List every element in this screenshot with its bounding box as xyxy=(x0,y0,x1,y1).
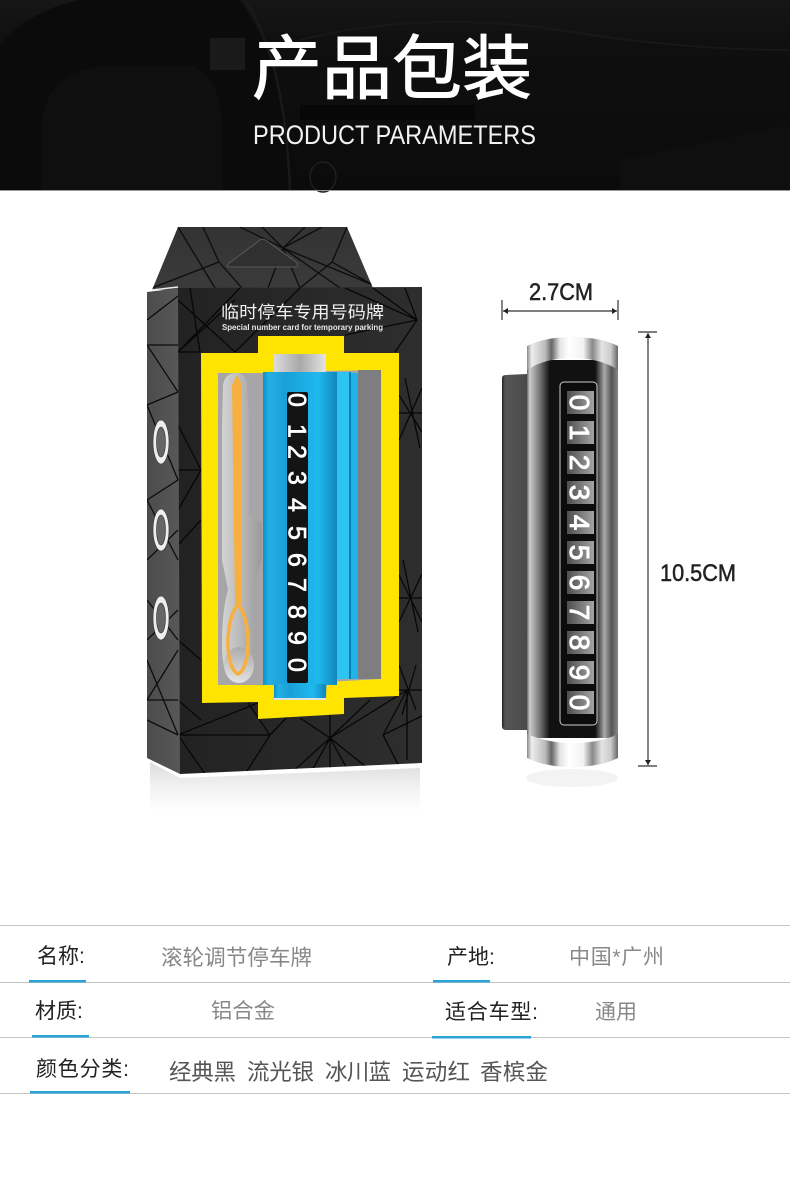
header banner xyxy=(0,0,790,192)
parameter table xyxy=(0,925,790,1094)
box hanger flap xyxy=(152,227,373,290)
row 3 colours: 颜色分类: xyxy=(36,1058,129,1081)
row 2 material: 材质: xyxy=(35,1000,83,1023)
number strip: blue version: 9 xyxy=(282,631,310,645)
number strip: silver version: 0 xyxy=(564,695,595,710)
cap reflection xyxy=(526,769,618,787)
number strip: blue version: 2 xyxy=(282,445,310,459)
row 3 colours: 流光银 xyxy=(247,1060,314,1085)
bottom metal cap xyxy=(527,734,618,767)
number strip: silver version: 7 xyxy=(564,605,595,620)
number strip: blue version: 0 xyxy=(282,393,310,407)
number strip: blue version: 7 xyxy=(282,578,310,592)
title: 产品包装 xyxy=(252,30,532,108)
number strip: blue version: 4 xyxy=(282,498,310,512)
box side logos xyxy=(153,420,169,640)
subtitle: PRODUCT PARAMETERS xyxy=(253,120,536,150)
number strip: silver version: 8 xyxy=(564,635,595,650)
row 2 vehicle type: 适合车型: xyxy=(445,1001,538,1024)
row 1 origin xyxy=(447,946,664,969)
row 1 name: 滚轮调节停车牌 xyxy=(161,945,312,970)
height dimension xyxy=(638,332,736,766)
row 1 name xyxy=(37,945,312,970)
back clip xyxy=(502,374,527,730)
number strip: blue version: 0 xyxy=(282,658,310,672)
number strip: silver version: 3 xyxy=(564,485,595,500)
row 2 material: 铝合金 xyxy=(211,999,275,1023)
number strip: blue version xyxy=(282,392,310,683)
row 3 colours: 经典黑 xyxy=(169,1060,236,1085)
width dimension xyxy=(502,279,618,320)
number strip: silver version xyxy=(560,382,597,725)
row 3 colours: 冰川蓝 xyxy=(325,1060,391,1085)
number strip: silver version: 4 xyxy=(564,515,595,530)
number strip: silver version: 6 xyxy=(564,575,595,590)
product: silver parking card xyxy=(502,337,618,787)
width label: 2.7CM xyxy=(529,279,593,306)
box side face xyxy=(147,288,180,774)
blue cylinder xyxy=(263,354,358,700)
row 2 vehicle type xyxy=(445,1001,637,1024)
box front face xyxy=(178,287,422,774)
row 2 vehicle type: 通用 xyxy=(595,1001,637,1024)
row 1 origin: 中国*广州 xyxy=(569,946,664,969)
cylinder body xyxy=(527,360,618,738)
number strip: silver version: 9 xyxy=(564,665,595,680)
row 1 origin: 产地: xyxy=(447,946,495,969)
key slot xyxy=(222,373,262,683)
number strip: blue version: 3 xyxy=(282,471,310,485)
tray window xyxy=(218,370,381,700)
row 3 colours: 香槟金 xyxy=(480,1060,548,1085)
number strip: silver version: 0 xyxy=(564,395,595,410)
number strip: silver version: 2 xyxy=(564,455,595,470)
row 3 colours xyxy=(36,1058,548,1085)
row 3 colours: 运动红 xyxy=(402,1060,470,1085)
packaging box xyxy=(147,227,422,812)
box subtitle: Special number card for temporary parking xyxy=(222,323,383,332)
top metal cap xyxy=(527,337,618,370)
number strip: blue version: 5 xyxy=(282,526,310,540)
number strip: silver version: 1 xyxy=(564,425,595,440)
number strip: blue version: 1 xyxy=(282,424,310,438)
orange hook tool xyxy=(228,375,248,674)
height label: 10.5CM xyxy=(660,560,736,587)
box title: 临时停车专用号码牌 xyxy=(221,303,384,322)
box reflection xyxy=(150,762,420,812)
yellow window frame xyxy=(201,336,399,719)
number strip: blue version: 6 xyxy=(282,553,310,567)
right gray tray xyxy=(358,370,381,679)
row 2 material xyxy=(35,999,275,1023)
number strip: blue version: 8 xyxy=(282,605,310,619)
row 1 name: 名称: xyxy=(37,945,85,968)
number strip: silver version: 5 xyxy=(564,545,595,560)
